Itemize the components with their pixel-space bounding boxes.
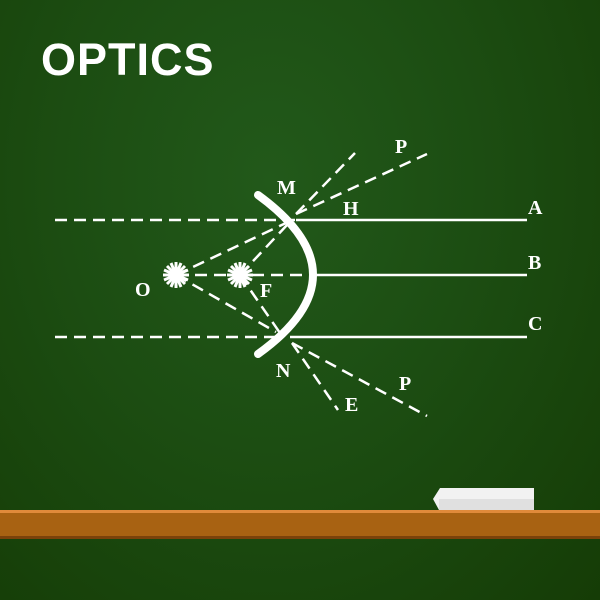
labels: P	[395, 136, 407, 158]
labels: H	[343, 198, 359, 220]
labels: C	[528, 313, 542, 335]
icon: star O	[163, 262, 189, 288]
icon: star F	[227, 262, 253, 288]
labels: A	[528, 197, 543, 219]
labels: M	[277, 177, 296, 199]
mirror	[258, 195, 313, 354]
labels: O	[135, 279, 151, 301]
labels: P	[399, 373, 411, 395]
dashed incident rays	[55, 153, 427, 416]
labels	[135, 136, 543, 416]
title: OPTICS	[41, 34, 215, 85]
labels: E	[345, 394, 358, 416]
solid reflected lines A B C	[290, 220, 527, 337]
labels: F	[260, 280, 272, 302]
shelf	[0, 510, 600, 539]
labels: B	[528, 252, 541, 274]
chalk	[433, 488, 534, 510]
labels: N	[276, 360, 291, 382]
